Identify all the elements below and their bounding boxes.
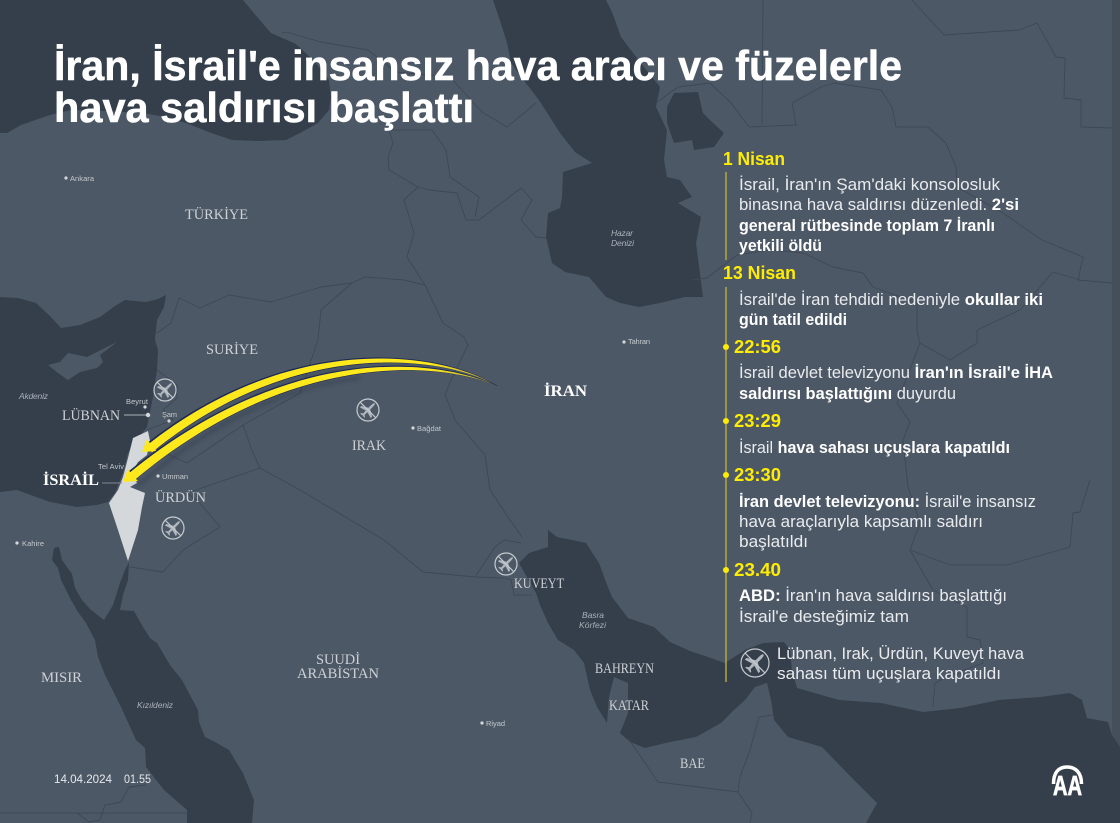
title: İran, İsrail'e insansız hava aracı ve füzelerle xyxy=(54,42,902,89)
Kara-Bogaz lagoon xyxy=(667,92,724,150)
Red Sea with Suez and Aqaba gulfs xyxy=(52,547,254,823)
country labels: KUVEYT xyxy=(514,576,564,592)
Cyprus xyxy=(48,342,117,380)
entry: 22:56: 22:56 xyxy=(734,336,781,357)
entry: 23:30: 23:30 xyxy=(734,464,781,485)
date and time: 01.55 xyxy=(124,772,151,786)
no-fly icon: Iraq xyxy=(357,398,380,421)
city labels: Umman xyxy=(162,472,188,481)
legend text xyxy=(777,644,1025,683)
no-fly icon: Kuwait xyxy=(495,552,518,575)
country labels: SUUDİ xyxy=(316,652,360,668)
date and time xyxy=(54,772,151,786)
country labels: IRAK xyxy=(352,438,386,454)
entry: 22:56 xyxy=(734,336,1053,403)
city labels: Beyrut xyxy=(126,397,149,406)
Mediterranean Sea xyxy=(0,295,166,507)
legend icon xyxy=(741,648,770,677)
title xyxy=(54,42,902,131)
timeline rules xyxy=(725,172,727,682)
AA logo: AA xyxy=(1053,770,1082,801)
entry: 23.40: ABD: İran'ın hava saldırısı başlattığı xyxy=(739,586,1007,605)
entry: 22:56: İsrail devlet televizyonu İran'ın İsrail'e İHA xyxy=(739,363,1053,382)
country labels: LÜBNAN xyxy=(62,407,120,424)
country labels: KATAR xyxy=(609,698,649,714)
date and time: 14.04.2024 xyxy=(54,772,112,786)
entry: 13 Nisan: İsrail'de İran tehdidi nedeniyle okullar iki xyxy=(739,290,1043,309)
country labels: BAE xyxy=(680,756,705,772)
timeline dots xyxy=(723,344,729,573)
country labels: ÜRDÜN xyxy=(155,489,206,506)
legend: closed airspace xyxy=(741,644,1025,683)
country labels: SURİYE xyxy=(206,342,258,358)
entry: 23:29: 23:29 xyxy=(734,410,781,431)
entry: 1 Nisan: general rütbesinde toplam 7 İranlı xyxy=(739,216,995,235)
country labels: ARABİSTAN xyxy=(297,666,379,682)
entry: 23.40 xyxy=(734,559,1007,626)
sea labels: Basra xyxy=(582,610,604,620)
entry: 23.40: İsrail'e desteğimiz tam xyxy=(739,607,909,626)
sea labels: Hazar xyxy=(611,228,634,238)
city labels xyxy=(15,174,650,728)
sea labels: Kızıldeniz xyxy=(137,700,174,710)
city labels: Kahire xyxy=(22,539,44,548)
AA logo xyxy=(1053,767,1082,801)
right edge strip xyxy=(1112,0,1120,823)
city labels: Şam xyxy=(162,410,177,419)
entry: 13 Nisan: gün tatil edildi xyxy=(739,310,847,329)
legend text: Lübnan, Irak, Ürdün, Kuveyt hava xyxy=(777,644,1025,663)
city labels: Ankara xyxy=(70,174,95,183)
city labels: Riyad xyxy=(486,719,505,728)
missile arcs xyxy=(123,357,497,486)
sea labels: Körfezi xyxy=(579,620,607,630)
Persian Gulf and Gulf of Oman xyxy=(519,530,1120,823)
country labels xyxy=(41,206,705,772)
upper arc xyxy=(142,357,497,453)
entry: 1 Nisan: binasına hava saldırısı düzenledi. 2'si xyxy=(739,195,1019,214)
Black Sea xyxy=(0,0,331,141)
country labels: İRAN xyxy=(544,381,587,400)
country labels: BAHREYN xyxy=(595,661,654,677)
country labels: MISIR xyxy=(41,670,82,686)
entry: 23:29 xyxy=(734,410,1010,457)
entry: 23:30: hava araçlarıyla kapsamlı saldırı xyxy=(739,512,983,531)
legend text: sahası tüm uçuşlara kapatıldı xyxy=(777,664,1001,683)
city labels: Tel Aviv xyxy=(98,462,124,471)
entry: 23:30 xyxy=(734,464,1036,551)
no-fly icon: Jordan xyxy=(162,516,185,539)
Caspian Sea xyxy=(493,0,703,307)
Israel territory xyxy=(109,431,150,561)
arc shadows xyxy=(137,370,360,486)
entry: 1 Nisan xyxy=(723,148,1019,255)
sea labels xyxy=(18,228,635,710)
entry: 23:30: başlatıldı xyxy=(739,532,808,551)
city labels: Bağdat xyxy=(417,424,442,433)
entry: 23.40: 23.40 xyxy=(734,559,781,580)
lower arc xyxy=(123,366,497,482)
country labels: İSRAİL xyxy=(43,470,99,489)
sea labels: Akdeniz xyxy=(18,391,49,401)
no-fly icon: Lebanon xyxy=(154,378,177,401)
entry: 1 Nisan: yetkili öldü xyxy=(739,236,822,255)
city labels: Tahran xyxy=(628,337,650,346)
entry: 13 Nisan xyxy=(723,262,1043,329)
sea labels: Denizi xyxy=(611,238,635,248)
entry: 13 Nisan: 13 Nisan xyxy=(723,262,796,283)
country labels: TÜRKİYE xyxy=(185,206,248,223)
entry: 1 Nisan: İsrail, İran'ın Şam'daki konsolosluk xyxy=(739,175,1000,194)
entry: 22:56: saldırısı başlattığını duyurdu xyxy=(739,384,956,403)
entry: 23:30: İran devlet televizyonu: İsrail'e insansız xyxy=(739,492,1036,511)
timeline xyxy=(723,148,1053,682)
entry: 1 Nisan: 1 Nisan xyxy=(723,148,785,169)
entry: 23:29: İsrail hava sahası uçuşlara kapatıldı xyxy=(739,438,1010,457)
title: hava saldırısı başlattı xyxy=(54,84,474,131)
